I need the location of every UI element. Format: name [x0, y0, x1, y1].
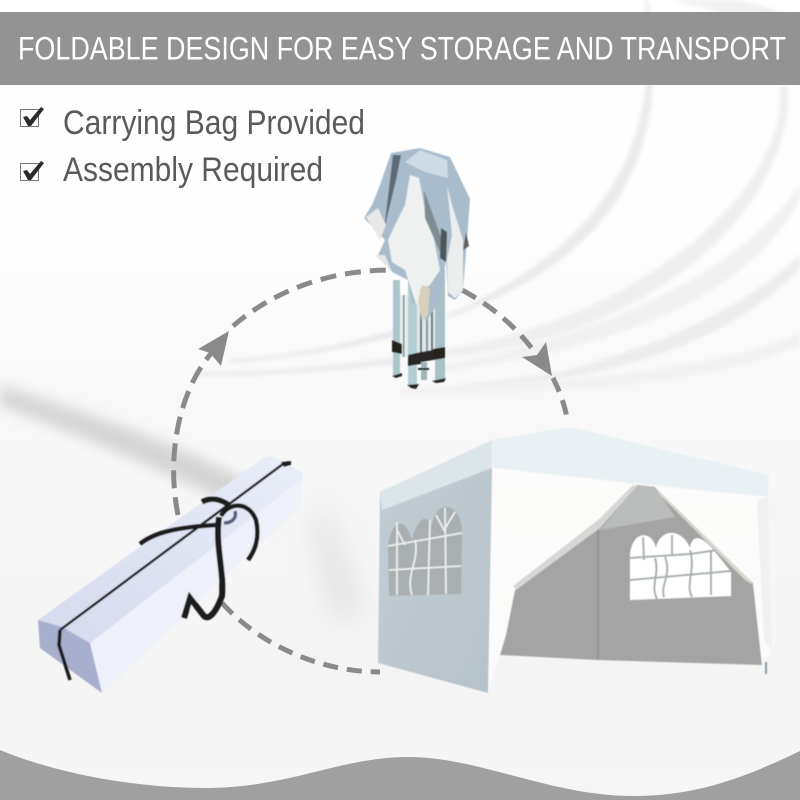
tent foot [765, 662, 767, 674]
folded canopy frame [364, 148, 470, 389]
back window [630, 533, 731, 600]
bag straps [140, 499, 257, 618]
bag end face [38, 620, 102, 693]
icon: checkbox 1 [20, 107, 44, 126]
arrow head: right [522, 342, 552, 376]
side window [388, 507, 462, 596]
frame legs [392, 270, 446, 389]
right curtain [655, 487, 772, 665]
bag front face [90, 478, 303, 693]
title banner [0, 12, 800, 85]
tent [378, 427, 772, 693]
dashed arc: folded frame to tent [462, 290, 568, 423]
bag body [38, 456, 303, 693]
left curtain [488, 468, 637, 693]
dashed arc: tent to bag [222, 603, 380, 672]
arrow head: left [198, 331, 229, 366]
roof [492, 427, 769, 497]
carrying bag [38, 456, 303, 693]
bag zipper [60, 464, 283, 630]
tent interior [500, 485, 762, 665]
folded fabric [364, 148, 470, 322]
left valance [380, 440, 492, 510]
feature list [20, 104, 365, 189]
text: assembly required: Assembly Required [63, 151, 323, 189]
bottom grey wave [0, 750, 800, 800]
text: carrying bag: Carrying Bag Provided [63, 104, 365, 142]
dashed arc: bag to folded frame [174, 270, 392, 515]
icon: checkbox 2 [20, 161, 44, 180]
left wall [378, 442, 492, 693]
